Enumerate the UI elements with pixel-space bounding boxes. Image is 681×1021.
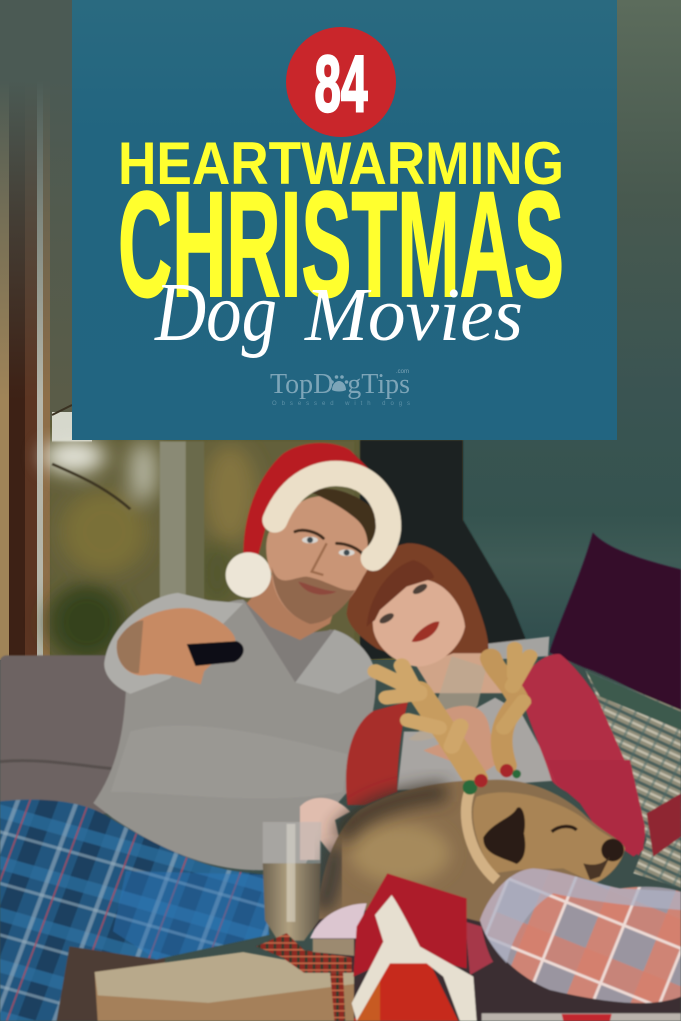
man's arm behind woman (478, 637, 549, 660)
red gift (352, 873, 477, 1021)
logo: TopDogTips: .com (396, 369, 409, 375)
man's neck (247, 573, 335, 640)
logo: TopDogTips: Obsessed with dogs (272, 401, 410, 407)
burgundy pillow (549, 533, 681, 713)
reindeer antlers (376, 649, 530, 779)
cardigan sleeve over cushion (547, 760, 645, 857)
trees outside the window (43, 439, 354, 667)
hat fur trim (275, 473, 388, 558)
white tray with red detail (482, 1013, 681, 1021)
dark blanket under dog (313, 893, 681, 1021)
red pajama fold (465, 922, 493, 975)
man's hand on dog (300, 798, 350, 860)
knit plaid cushion (585, 670, 681, 888)
champagne flute (263, 822, 321, 941)
heading: heartwarming: HEARTWARMING (118, 130, 564, 197)
dog headband (466, 790, 497, 880)
man's hand holding remote (117, 608, 244, 684)
jingle bells (463, 764, 521, 795)
woman's hair (347, 543, 488, 670)
woman's face (367, 560, 465, 667)
panel: title (72, 0, 617, 440)
woman's shirt (397, 698, 558, 790)
photo: couple and dog on sofa (0, 439, 681, 1021)
logo: TopDogTips: TopDogTips (270, 368, 410, 400)
wine glass and hand (408, 656, 497, 777)
pink plaid pajama leg (480, 868, 681, 1003)
subheading: dog movies: Movies (304, 273, 523, 357)
gold gift box (95, 933, 354, 1021)
santa hat (226, 443, 368, 598)
window frame (0, 0, 50, 660)
subheading: dog movies (154, 266, 523, 359)
dog (317, 780, 625, 923)
man's sweatshirt (93, 593, 376, 870)
background: window view behind panel (0, 0, 681, 660)
sofa (0, 655, 165, 1021)
subheading: dog movies: Dog (154, 266, 277, 359)
blue plaid pajamas (0, 800, 269, 1021)
woman's cardigan (346, 654, 645, 856)
woman's neck (417, 653, 503, 693)
pink pajama knee (310, 903, 367, 938)
badge: red circle with number: 84 (314, 39, 368, 128)
dark tree reflection (360, 440, 530, 660)
badge: red circle with number (286, 27, 396, 137)
man's face (266, 489, 382, 624)
